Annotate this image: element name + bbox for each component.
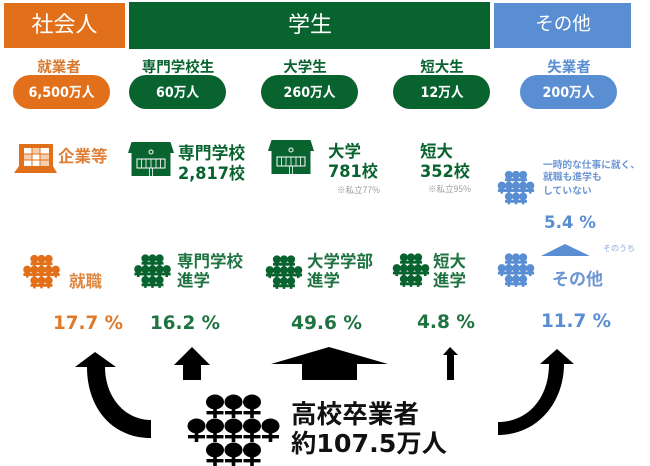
arrow: curved to other — [498, 349, 574, 435]
label: その他: その他 — [552, 265, 603, 290]
population: 専門学校生 — [129, 56, 226, 109]
label: 企業等: 企業等 — [58, 143, 108, 167]
note: 私立77%: ※私立77% — [337, 184, 380, 196]
icon: people, temporary work — [498, 172, 534, 204]
label: 専門学校進学: 専門学校 — [177, 251, 244, 271]
value: 5.4%: 5.4 % — [544, 213, 596, 233]
label: 高校卒業者 約107.5万人 — [291, 394, 447, 458]
population: 失業者: 失業者 — [547, 56, 591, 77]
population: 就業者 — [13, 56, 110, 109]
population: 短大生: 12万人 — [420, 85, 464, 101]
label: 専門学校 2,817校: 2,817校 — [178, 164, 245, 183]
header: その他: その他 — [535, 10, 591, 36]
label: 専門学校進学: 進学 — [177, 270, 210, 290]
value: 49.6%: 49.6 % — [291, 313, 362, 334]
header: その他 — [494, 3, 631, 48]
icon: vocational school building — [128, 142, 174, 176]
icon: people, other — [498, 254, 534, 286]
label: 一時的な仕事に就く: していない — [543, 185, 592, 197]
label: 高校卒業者 約107.5万人: 約107.5万人 — [291, 429, 447, 458]
label: 大学学部進学: 大学学部 — [307, 251, 374, 271]
label: 高校卒業者 約107.5万人: 高校卒業者 — [291, 394, 419, 431]
arrow: curved to employment — [75, 352, 151, 438]
label: 一時的な仕事に就く: 一時的な仕事に就く、 — [543, 158, 640, 171]
label: 一時的な仕事に就く: 就職も進学も — [543, 170, 602, 183]
label: 専門学校 2,817校 — [178, 140, 245, 183]
label: 専門学校 2,817校: 専門学校 — [178, 140, 245, 164]
population: 就業者: 6,500万人 — [28, 85, 94, 101]
population: 専門学校生: 60万人 — [156, 85, 199, 101]
label: 一時的な仕事に就く — [543, 158, 640, 197]
population: 専門学校生: 専門学校生 — [142, 56, 214, 77]
label: 大学 781校 — [328, 138, 378, 181]
header: 社会人 — [4, 3, 125, 48]
population: 大学生: 260万人 — [284, 85, 336, 101]
icon: company building — [14, 144, 57, 173]
label: 短大進学: 進学 — [433, 270, 466, 290]
arrow: to junior college — [443, 347, 458, 380]
label: 就職: 就職 — [69, 268, 102, 292]
icon: people, university — [266, 256, 302, 288]
arrow: to university — [271, 347, 388, 380]
label: 短大 352校 — [420, 138, 470, 181]
label: 短大進学: 短大 — [433, 252, 466, 271]
note: そのうち: そのうち — [603, 243, 635, 254]
icon: graduates crowd — [188, 394, 280, 466]
icon: people, employment — [24, 256, 59, 288]
label: 専門学校進学 — [177, 251, 244, 290]
label: 大学学部進学 — [307, 251, 374, 290]
label: 大学学部進学: 進学 — [307, 270, 340, 290]
population: 就業者: 就業者 — [37, 56, 81, 77]
label: 短大 352校: 352校 — [420, 162, 470, 181]
value: 11.7%: 11.7 % — [541, 311, 611, 332]
population: 短大生: 短大生 — [420, 56, 464, 77]
label: 短大進学 — [433, 252, 466, 290]
value: 16.2%: 16.2 % — [150, 313, 220, 334]
population: 短大生 — [393, 56, 490, 109]
icon: people, vocational — [135, 255, 170, 287]
icon: people, junior college — [393, 254, 429, 286]
note: 私立95%: ※私立95% — [428, 183, 471, 195]
header: 学生: 学生 — [288, 7, 332, 39]
icon: small blue triangle — [541, 244, 590, 256]
value: 4.8%: 4.8 % — [417, 312, 475, 333]
population: 大学生 — [261, 56, 358, 109]
population: 大学生: 大学生 — [283, 56, 327, 77]
population: 失業者: 200万人 — [542, 85, 594, 101]
population: 失業者 — [520, 56, 617, 109]
label: 短大 352校: 短大 — [420, 138, 453, 162]
label: 大学 781校: 大学 — [328, 138, 361, 162]
header: 社会人: 社会人 — [31, 7, 98, 39]
label: 大学 781校: 781校 — [328, 162, 378, 181]
value: 17.7%: 17.7 % — [53, 313, 123, 334]
arrow: to vocational — [174, 347, 210, 380]
icon: university building — [268, 140, 314, 174]
header: 学生 — [129, 2, 490, 49]
